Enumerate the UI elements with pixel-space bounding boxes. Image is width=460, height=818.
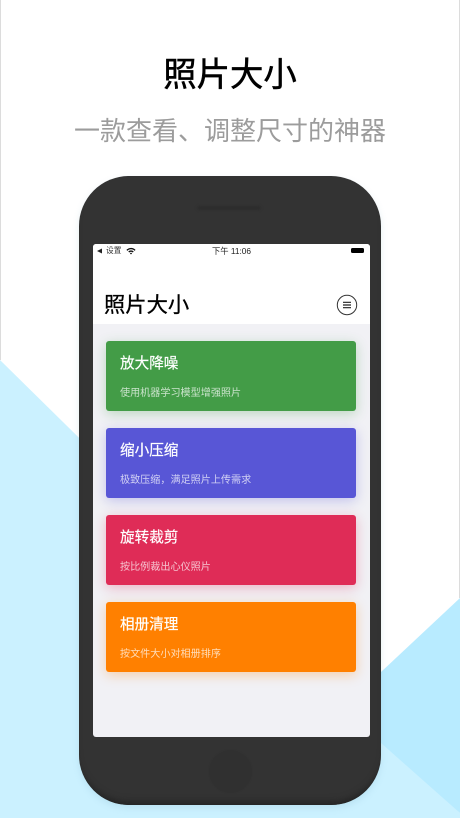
card: album cleanup: 相册清理: [120, 616, 178, 632]
status bar carrier and wifi: [97, 246, 136, 255]
phone mockup: [79, 176, 381, 805]
card: album cleanup: 按文件大小对相册排序: [120, 648, 221, 660]
subtitle: 一款查看、调整尺寸的神器: [74, 116, 386, 146]
card: upscale and denoise: 使用机器学习模型增强照片: [120, 388, 241, 398]
card: rotate and crop: 按比例裁出心仪照片: [120, 562, 211, 572]
card: upscale and denoise: 放大降噪: [120, 356, 178, 372]
menu icon: [336, 294, 358, 316]
card: rotate and crop: 旋转裁剪: [120, 530, 178, 546]
app screen: [93, 244, 370, 737]
card: shrink and compress: 缩小压缩: [120, 442, 178, 458]
status bar carrier and wifi: 设置: [106, 246, 121, 255]
status bar battery: [351, 248, 364, 253]
title: 照片大小: [163, 56, 297, 94]
card: shrink and compress: [106, 428, 356, 498]
card: rotate and crop: [106, 515, 356, 585]
speaker: [197, 206, 261, 210]
navigation header: [93, 244, 370, 324]
status bar time: 下午 11:06: [212, 246, 251, 256]
home button: [209, 750, 252, 793]
card: album cleanup: [106, 602, 356, 672]
card: shrink and compress: 极致压缩，满足照片上传需求: [120, 474, 251, 486]
app title: 照片大小: [104, 293, 189, 317]
card: upscale and denoise: [106, 341, 356, 411]
